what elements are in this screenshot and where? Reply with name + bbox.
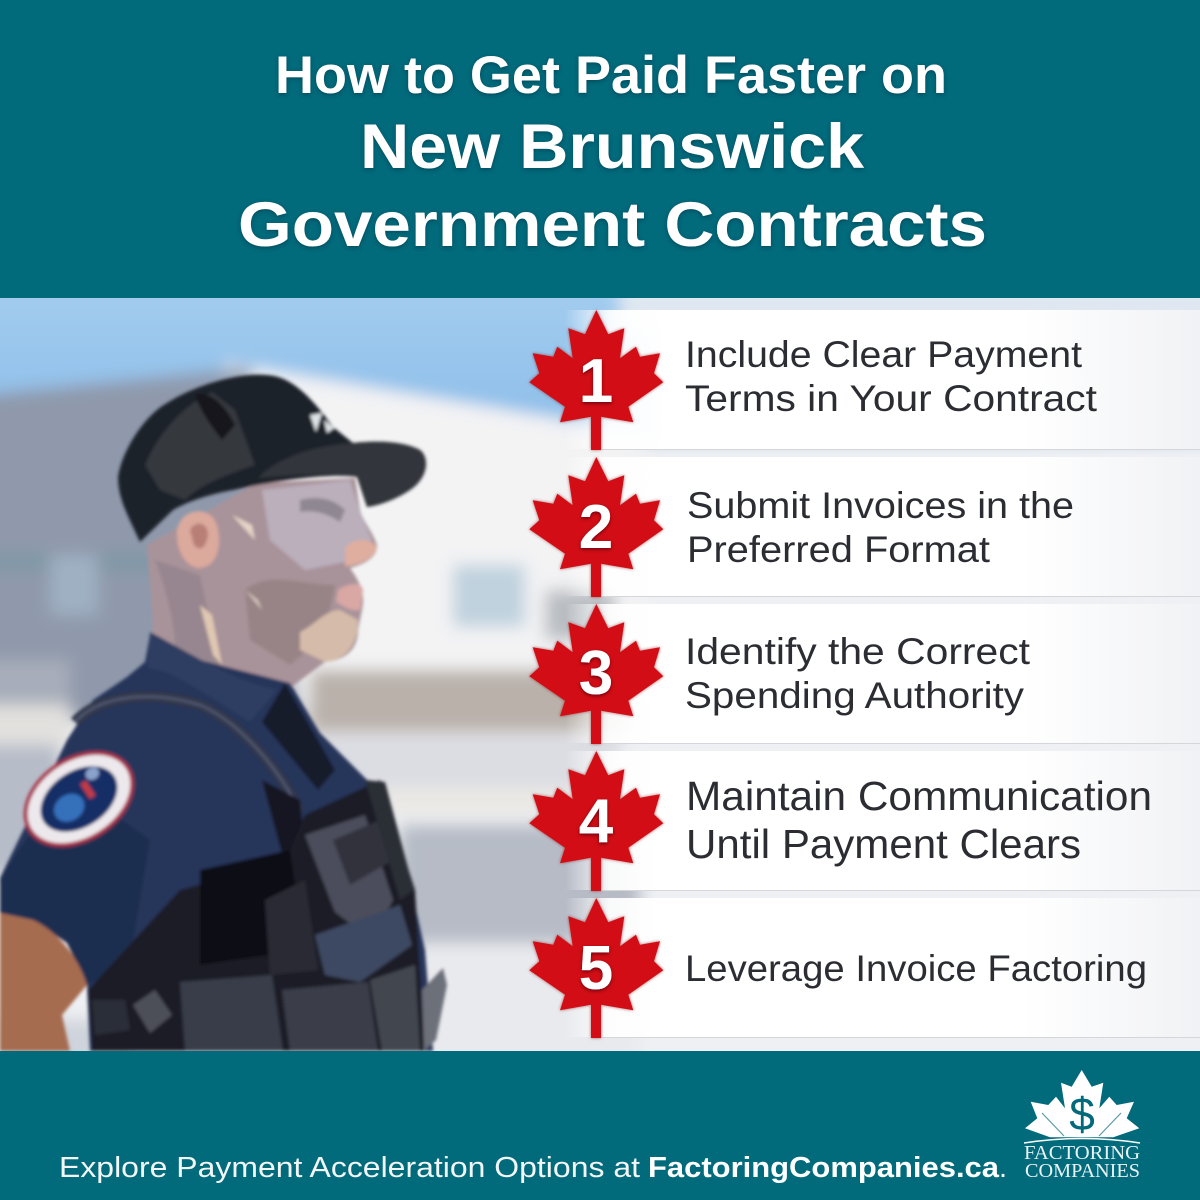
title: Government Contracts: [238, 190, 987, 260]
footer band: [0, 1051, 1200, 1200]
icon: maple leaf number 3: [529, 604, 663, 744]
step 3 text: Spending Authority: [685, 675, 1025, 716]
shoulder patch: [21, 748, 137, 850]
blurred background: sky, buildings and road: [0, 270, 1200, 1073]
title: New Brunswick: [360, 112, 865, 182]
icon: maple leaf number 5: 5: [579, 934, 613, 1003]
icon: maple leaf number 1: [529, 310, 663, 450]
step 3 panel: [565, 604, 1200, 744]
step 2 text: Preferred Format: [687, 529, 991, 570]
step 1 panel: [565, 310, 1200, 450]
photo: security guard in front of a building: [0, 270, 1200, 1073]
icon: maple leaf number 1: 1: [579, 347, 613, 416]
icon: maple leaf number 4: [529, 751, 663, 891]
ear: [177, 511, 219, 568]
step 4 text: Until Payment Clears: [686, 821, 1081, 867]
footer call to action: FactoringCompanies.ca: [648, 1152, 1000, 1184]
icon: maple leaf number 2: [529, 457, 663, 597]
bare forearm: [0, 913, 87, 1051]
guard figure: [0, 375, 447, 1051]
step 1 text: Terms in Your Contract: [685, 378, 1098, 419]
step 1 text: Include Clear Payment: [685, 334, 1083, 375]
icon: maple leaf number 5: [529, 898, 663, 1038]
title: [238, 46, 987, 260]
step 4 text: Maintain Communication: [686, 773, 1152, 819]
step 5 panel: [565, 898, 1200, 1038]
footer call to action: Explore Payment Acceleration Options at: [59, 1152, 640, 1184]
vest strap: [75, 697, 300, 812]
icon: maple leaf number 4: 4: [579, 787, 614, 856]
uniform shirt: [0, 635, 433, 1051]
tactical vest: [88, 780, 425, 1051]
logo: Factoring Companies: FACTORING: [1024, 1142, 1140, 1164]
step 2 text: Submit Invoices in the: [687, 485, 1074, 526]
logo: Factoring Companies: [1024, 1070, 1140, 1182]
cap: [116, 372, 355, 544]
step 3 text: Identify the Correct: [685, 631, 1031, 672]
logo: Factoring Companies: $: [1069, 1088, 1095, 1140]
icon: maple leaf number 2: 2: [579, 493, 613, 562]
logo: Factoring Companies: COMPANIES: [1025, 1160, 1140, 1182]
header band: [0, 0, 1200, 298]
step 4 panel: [565, 751, 1200, 891]
step 2 panel: [565, 457, 1200, 597]
icon: maple leaf number 3: 3: [579, 639, 613, 708]
step 5 text: Leverage Invoice Factoring: [685, 948, 1147, 989]
neck and face: [147, 478, 377, 705]
title: How to Get Paid Faster on: [275, 46, 947, 105]
footer call to action: .: [999, 1152, 1007, 1184]
